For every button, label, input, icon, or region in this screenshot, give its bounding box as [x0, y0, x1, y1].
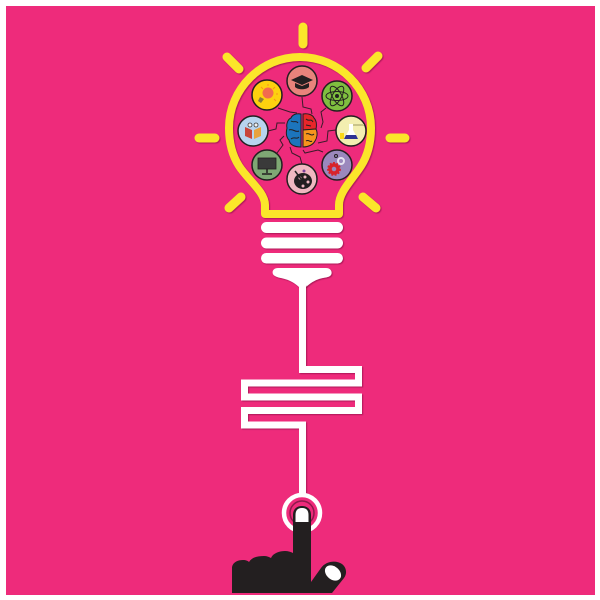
- icon: brain: [286, 114, 317, 147]
- icon: atom circle: [322, 81, 352, 111]
- icon: light bulb circle: [252, 80, 282, 110]
- bulb base cap: [273, 268, 332, 287]
- button ring: [284, 495, 320, 531]
- icon: book circle: [238, 116, 268, 146]
- bulb outline: [229, 57, 371, 214]
- icon: palette circle: [287, 164, 317, 194]
- icon: gears circle: [322, 150, 352, 180]
- light rays: [199, 27, 405, 208]
- zigzag wire: [244, 285, 358, 495]
- icon: graduation cap circle: [287, 66, 317, 96]
- connector lines: [268, 97, 336, 164]
- icon: monitor circle: [252, 150, 282, 180]
- bulb screw threads: [261, 222, 343, 264]
- icon: flask circle: [336, 116, 366, 146]
- hand pressing button: [232, 506, 346, 593]
